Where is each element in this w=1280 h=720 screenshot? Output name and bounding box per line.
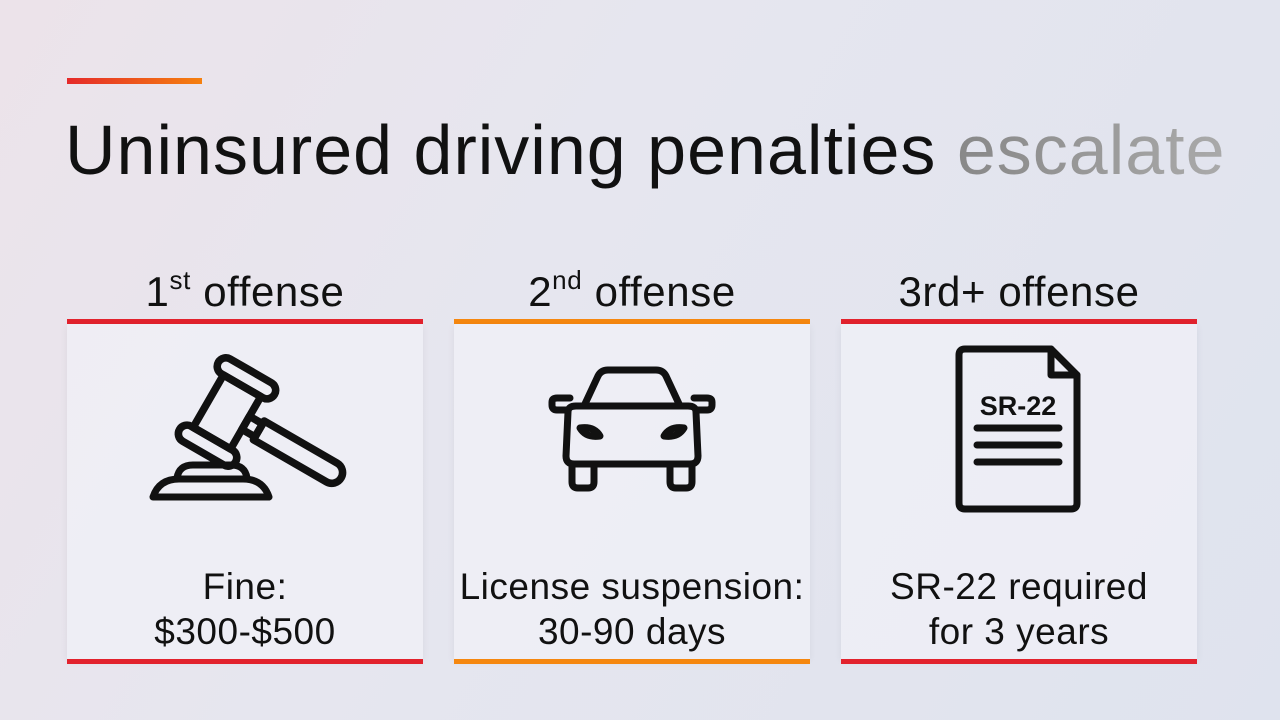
icon: SR-22 document	[956, 346, 1080, 512]
panel: 1st offense	[67, 319, 423, 664]
text: fine	[154, 566, 336, 652]
text: license suspension: 30-90 days	[538, 611, 726, 652]
text: SR-22 required	[890, 566, 1148, 652]
text: fine: $300-$500	[154, 611, 336, 652]
accent bar	[67, 78, 202, 84]
text: license suspension: License suspension:	[460, 566, 804, 607]
text: SR-22 required: SR-22 required	[890, 566, 1148, 607]
text: SR-22 required: for 3 years	[929, 611, 1109, 652]
panel: 3rd+ offense	[841, 319, 1197, 664]
text: fine: Fine:	[203, 566, 287, 607]
heading: 2nd offense: 2nd offense	[528, 265, 736, 315]
icon: car	[548, 366, 716, 492]
icon: SR-22 document: SR-22	[980, 391, 1056, 421]
heading: 3rd+ offense: 3rd+ offense	[898, 268, 1140, 315]
text: license suspension	[460, 566, 804, 652]
heading: 1st offense: 1st offense	[146, 265, 344, 315]
title: Uninsured driving penalties escalate	[65, 111, 1226, 189]
icon: gavel	[150, 354, 346, 500]
panel: 2nd offense	[454, 319, 810, 664]
